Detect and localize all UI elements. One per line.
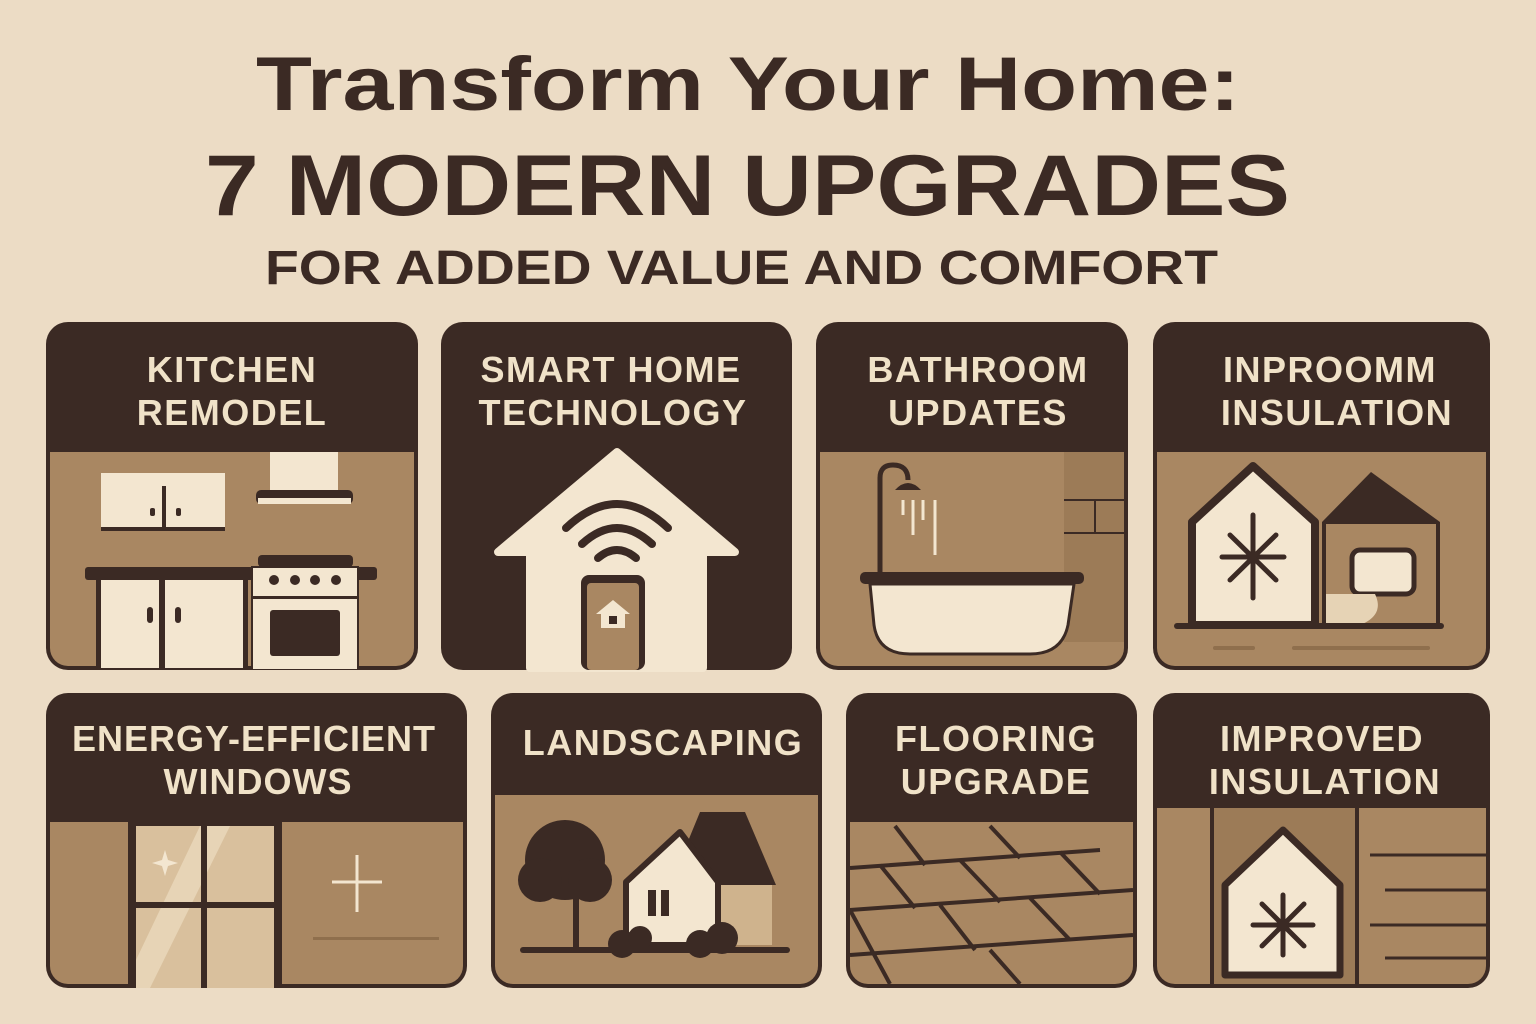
panel: improved insulation [1153, 693, 1490, 988]
heading: kitchen: REMODEL [137, 392, 327, 433]
heading: windows: WINDOWS [164, 761, 352, 802]
panel: insulation (top) [1153, 322, 1490, 670]
icon: window [128, 822, 439, 988]
panel: landscaping [491, 693, 822, 988]
heading: improved insulation: IMPROVED [1220, 718, 1424, 759]
heading: inproomm insulation: INPROOMM [1223, 349, 1437, 390]
heading: bathroom: UPDATES [888, 392, 1068, 433]
heading: kitchen [137, 349, 327, 433]
title: 7 MODERN UPGRADES [205, 138, 1290, 234]
heading: flooring: UPGRADE [901, 761, 1091, 802]
heading: windows: ENERGY-EFFICIENT [72, 718, 436, 759]
title: Transform Your Home: [256, 42, 1240, 127]
heading: flooring: FLOORING [895, 718, 1097, 759]
heading: smart home: TECHNOLOGY [478, 392, 748, 433]
heading: kitchen: KITCHEN [147, 349, 317, 390]
heading: bathroom: BATHROOM [867, 349, 1089, 390]
icon: bathtub [860, 465, 1124, 654]
icon: house with tree [518, 812, 790, 958]
icon: kitchen [85, 452, 377, 669]
title: FOR ADDED VALUE AND COMFORT [265, 242, 1218, 295]
heading: improved insulation: INSULATION [1209, 761, 1441, 802]
heading: improved insulation [1209, 718, 1441, 802]
heading: inproomm insulation [1221, 349, 1453, 433]
panel: kitchen remodel [46, 322, 418, 670]
icon: insulated house [1210, 808, 1486, 984]
icon: smart house [498, 452, 735, 670]
panel: smart home [441, 322, 792, 670]
heading: bathroom [867, 349, 1089, 433]
heading: smart home [478, 349, 748, 433]
panel: flooring [846, 693, 1137, 988]
panel: energy-efficient windows [46, 693, 467, 988]
icon: floor planks [850, 826, 1133, 984]
heading: windows [72, 718, 436, 802]
heading: smart home: SMART HOME [480, 349, 742, 390]
panel: bathroom [816, 322, 1128, 670]
heading: inproomm insulation: INSULATION [1221, 392, 1453, 433]
icon: houses snowflake [1174, 466, 1444, 650]
heading: landscaping: LANDSCAPING [523, 722, 803, 763]
heading: flooring [895, 718, 1097, 802]
title [205, 42, 1290, 295]
